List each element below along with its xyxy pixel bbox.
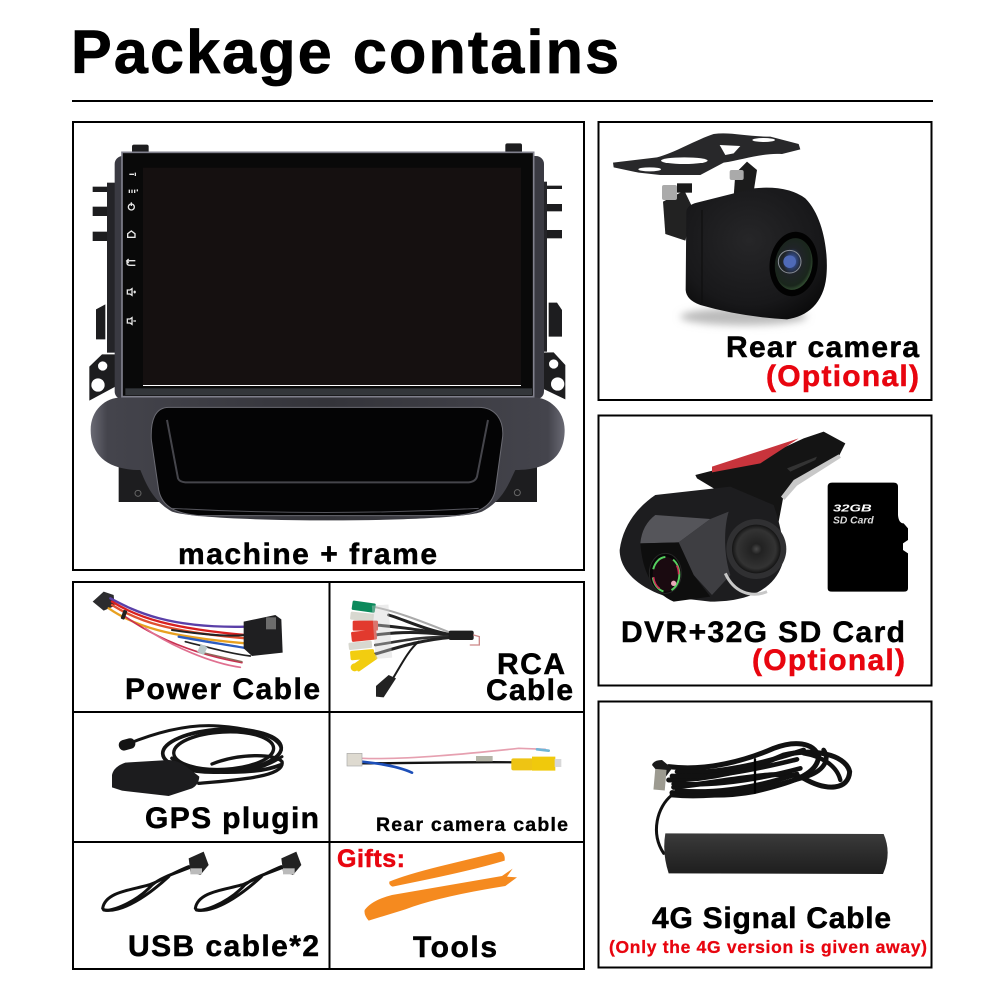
- label: 4G Signal Cable: 4G Signal Cable: [652, 902, 891, 935]
- label: USB cable*2: USB cable*2: [128, 930, 319, 963]
- panel: rear camera: [598, 122, 932, 400]
- panel: cable grid: [73, 582, 584, 969]
- icon: dash cam: [620, 432, 908, 602]
- icon: 4G antenna: [652, 744, 888, 874]
- illustration: head unit with frame: [89, 143, 565, 520]
- icon: GPS antenna: [112, 726, 282, 796]
- icon: orange pry tools: [364, 852, 517, 921]
- panel: machine + frame: [73, 122, 584, 571]
- label: DVR+32G SD Card: DVR+32G SD Card: [621, 616, 905, 649]
- icon: SD card: [828, 483, 908, 592]
- label: 4G version note: (Only the 4G version is given away): [609, 937, 927, 957]
- label: Rear camera: Rear camera: [726, 331, 919, 364]
- icon: rear camera cable: [347, 748, 561, 773]
- header rule: [72, 100, 933, 102]
- label: Optional: (Optional): [752, 644, 905, 677]
- title: Package contains: [71, 18, 619, 86]
- label: RCA Cable: Cable: [486, 674, 573, 707]
- panel: DVR + SD card: [598, 416, 932, 686]
- label: Gifts: Gifts:: [337, 845, 405, 873]
- label: Rear camera cable: Rear camera cable: [376, 814, 568, 836]
- icon: SD card: SD Card: [833, 516, 875, 527]
- icon: two USB cables: [103, 852, 301, 910]
- label: Tools: Tools: [413, 931, 497, 964]
- label: Optional: (Optional): [766, 360, 919, 393]
- panel: 4G signal cable: [598, 702, 932, 968]
- icon: power cable: [93, 592, 283, 667]
- icon: rear camera: [613, 133, 827, 325]
- label: Power Cable: Power Cable: [125, 673, 320, 706]
- icon: SD card: 32GB: [833, 504, 872, 515]
- icon: RCA cable: [348, 600, 479, 697]
- label: RCA Cable: RCA: [497, 648, 565, 681]
- label: machine + frame: machine + frame: [178, 538, 437, 571]
- label: RCA Cable: [486, 648, 573, 707]
- label: GPS plugin: GPS plugin: [145, 802, 319, 835]
- side touch icons: [127, 173, 137, 324]
